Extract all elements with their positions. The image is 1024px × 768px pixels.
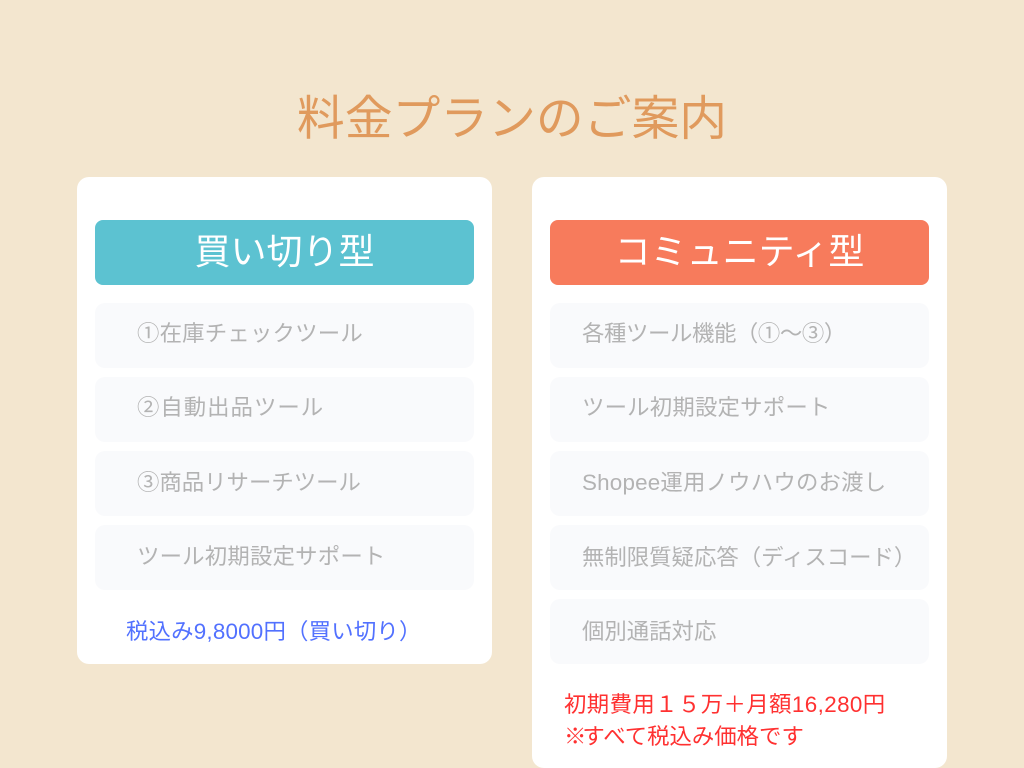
feature: stock check tool (95, 303, 474, 368)
feature: product research tool: ③商品リサーチツール (137, 470, 361, 495)
feature: unlimited Q&A (550, 525, 929, 590)
feature: initial setup support: ツール初期設定サポート (137, 544, 386, 569)
feature: stock check tool: ①在庫チェックツール (137, 321, 363, 346)
feature: product research tool (95, 451, 474, 516)
feature: all tools: 各種ツール機能（①〜③） (582, 321, 846, 346)
feature: individual calls (550, 599, 929, 664)
feature: Shopee know-how: Shopee運用ノウハウのお渡し (582, 470, 886, 495)
heading: buy-out plan (95, 220, 474, 285)
feature: Shopee know-how (550, 451, 929, 516)
feature: unlimited Q&A: 無制限質疑応答（ディスコード） (582, 545, 916, 570)
price: buy-out plan: 税込み9,8000円（買い切り） (126, 619, 422, 644)
heading: buy-out plan: 買い切り型 (194, 231, 374, 272)
price: community plan: 初期費用１５万＋月額16,280円 (564, 692, 886, 717)
feature: initial setup support: ツール初期設定サポート (582, 395, 830, 420)
feature: auto listing tool: ②自動出品ツール (137, 395, 324, 420)
panel: buy-out plan (77, 177, 492, 664)
feature: auto listing tool (95, 377, 474, 442)
feature: individual calls: 個別通話対応 (582, 619, 716, 644)
price: community plan (564, 692, 886, 749)
heading: community plan (550, 220, 929, 285)
panel: community plan (532, 177, 947, 768)
feature: initial setup support (550, 377, 929, 442)
feature: all tools (550, 303, 929, 368)
title: 料金プランのご案内 (297, 93, 727, 146)
price: community plan: ※すべて税込み価格です (564, 724, 804, 749)
heading: community plan: コミュニティ型 (615, 231, 864, 272)
feature: initial setup support (95, 525, 474, 590)
